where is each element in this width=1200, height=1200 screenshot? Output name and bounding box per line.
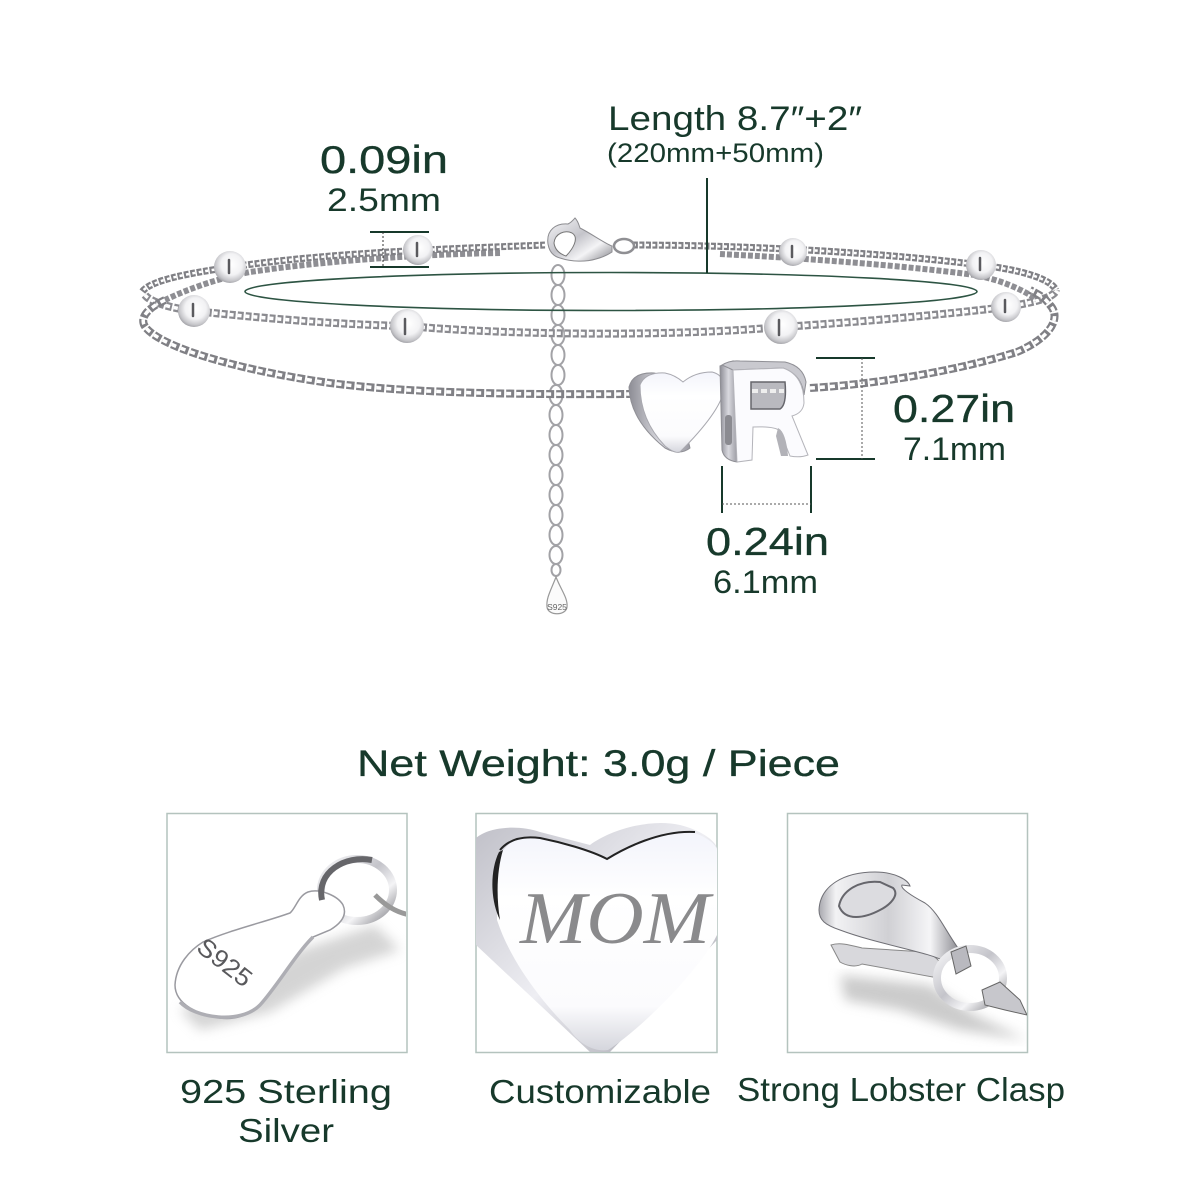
R slot bbox=[725, 415, 732, 445]
length leader line bbox=[706, 178, 708, 273]
latch bbox=[831, 944, 941, 978]
heart charm bbox=[629, 372, 724, 452]
lobster clasp bbox=[548, 218, 634, 261]
caption: customizable: Customizable bbox=[489, 1073, 711, 1110]
dimension: charm width: 0.24in bbox=[706, 521, 829, 564]
dimension: charm height: 7.1mm bbox=[903, 431, 1006, 467]
teardrop tag bbox=[175, 891, 345, 1018]
R hole bbox=[751, 382, 785, 409]
chain through hole bbox=[752, 389, 784, 393]
label: length: (220mm+50mm) bbox=[607, 138, 824, 168]
caption: sterling silver: Silver bbox=[238, 1112, 334, 1149]
ring collar bbox=[951, 946, 971, 974]
shadow bbox=[180, 925, 400, 1030]
tag edge bbox=[180, 937, 313, 1017]
dimension: charm height: 0.27in bbox=[893, 388, 1015, 431]
jump ring bbox=[321, 859, 393, 921]
dimension: bead size bbox=[320, 139, 448, 267]
dimension: bead size: 2.5mm bbox=[327, 182, 441, 218]
R face bbox=[733, 368, 808, 462]
dimension: charm width: 6.1mm bbox=[713, 564, 818, 600]
label: length bbox=[607, 100, 862, 168]
clasp opening bbox=[839, 882, 895, 917]
extender chain bbox=[550, 265, 564, 576]
heading: net weight: Net Weight: 3.0g / Piece bbox=[357, 743, 840, 784]
label: length: Length 8.7″+2″ bbox=[608, 100, 862, 138]
caption: lobster clasp: Strong Lobster Clasp bbox=[737, 1071, 1065, 1108]
dimension: charm height bbox=[816, 358, 1015, 467]
caption: sterling silver bbox=[180, 1073, 392, 1149]
ring bbox=[937, 949, 1003, 1007]
caption: sterling silver: 925 Sterling bbox=[180, 1073, 392, 1110]
engraved text: MOM bbox=[519, 878, 715, 960]
panel: customizable heart bbox=[476, 814, 717, 1052]
dimension: charm width bbox=[706, 466, 829, 600]
heart face bbox=[497, 832, 717, 1050]
panel: lobster clasp bbox=[788, 814, 1028, 1052]
letter R charm bbox=[720, 361, 808, 462]
engraving: S925 bbox=[191, 933, 257, 993]
chain strands bbox=[142, 245, 1056, 394]
R top side bbox=[722, 361, 806, 395]
shadow bbox=[840, 975, 1027, 1040]
rim crescent bbox=[492, 850, 503, 920]
R leg inner bbox=[776, 428, 788, 456]
ring front bbox=[321, 859, 372, 900]
clasp body bbox=[819, 872, 958, 962]
dimension: bead size: 0.09in bbox=[320, 139, 448, 182]
silver tag bbox=[547, 577, 567, 614]
R left side bbox=[720, 361, 737, 462]
panel: sterling silver tag bbox=[167, 814, 410, 1052]
rim line bbox=[500, 832, 695, 859]
chain link bbox=[982, 982, 1027, 1015]
small link bbox=[375, 895, 410, 915]
silver tag: S925 bbox=[547, 602, 567, 612]
bracelet bbox=[142, 218, 1056, 614]
heart back bbox=[476, 823, 717, 1052]
length ellipse guide bbox=[245, 272, 977, 310]
beads bbox=[178, 235, 1021, 344]
